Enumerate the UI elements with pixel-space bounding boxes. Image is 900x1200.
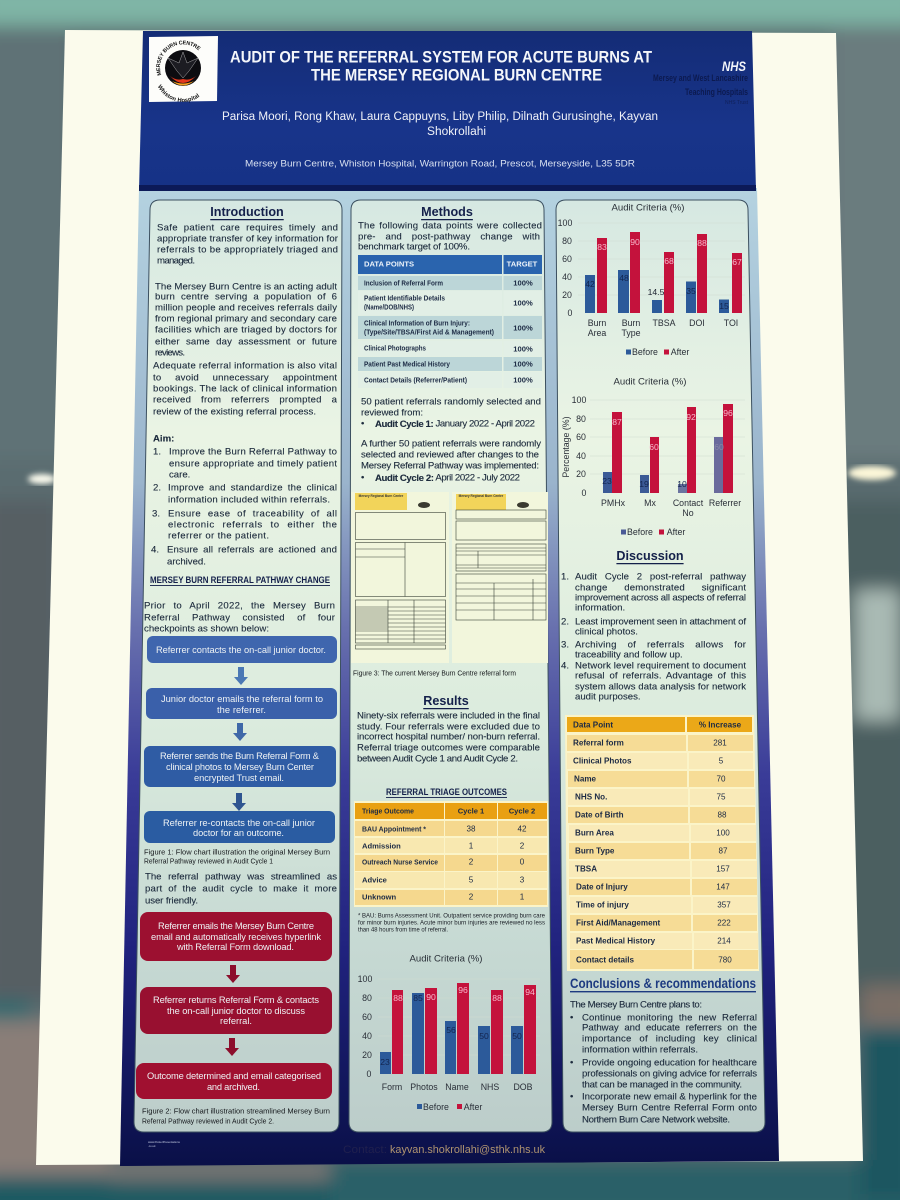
logo: MERSEY BURN CENTRE [156, 40, 201, 76]
text: introduction body: from regional primary and secondary care [155, 314, 337, 324]
text: discussion list [561, 572, 747, 702]
table: percent increase: First Aid/Management [576, 918, 661, 928]
table: percent increase: Name [574, 774, 597, 784]
panel: charts, discussion and conclusions [556, 200, 765, 1132]
bar chart: burn area, type, TBSA, DOI, TOI: 67 [732, 257, 742, 267]
text: conclusions list: Mersey Burn Centre Referral Form onto [582, 1102, 757, 1114]
bar chart: form, photos, name, NHS, DOB: 88 [492, 993, 502, 1003]
NHS trust logo: NHS Trust [725, 100, 749, 106]
bar chart: form, photos, name, NHS, DOB: 60 [362, 1012, 372, 1022]
text: methods intro [358, 220, 542, 252]
table: data points: Patient Identifiable Details [364, 294, 445, 302]
table: percent increase: Past Medical History [576, 936, 656, 946]
text: conclusions list: Northern Burn Care Network website. [582, 1114, 730, 1126]
figure: referral forms [351, 492, 548, 663]
bar chart: burn area, type, TBSA, DOI, TOI: 42 [585, 279, 595, 289]
table: triage outcomes: 0 [520, 858, 525, 866]
text: discussion list: 3. [561, 640, 569, 650]
flow chart: streamlined pathway: and archived. [207, 1082, 260, 1092]
bar chart: PMHx, Mx, contact number, referrer: 20 [576, 469, 586, 479]
bar chart: form, photos, name, NHS, DOB: 0 [367, 1069, 372, 1079]
table: data points: Patient Past Medical History [364, 360, 451, 368]
bar chart: form, photos, name, NHS, DOB: NHS [481, 1082, 499, 1092]
bar chart: PMHx, Mx, contact number, referrer: 40 [576, 451, 586, 461]
caption: figure 1: Figure 1: Flow chart illustration the original Mersey Burn [144, 848, 330, 856]
table: data points: Clinical Photographs [364, 344, 426, 352]
text: introduction body: Safe patient care requires timely and [157, 222, 338, 234]
heading: triage outcomes: REFERRAL TRIAGE OUTCOMES [386, 787, 507, 797]
bar chart: form, photos, name, NHS, DOB: After [464, 1102, 482, 1112]
bar chart: PMHx, Mx, contact number, referrer: Audit Criteria (%) [613, 376, 687, 388]
text: pathway intro: Prior to April 2022, the Mersey Burn [144, 600, 335, 612]
text: introduction body: to avoid unnecessary appointment [153, 372, 337, 384]
text: conclusions list: Provide ongoing education for healthcare [582, 1058, 757, 1068]
NHS trust logo: Teaching Hospitals [685, 87, 748, 97]
text: conclusions list: Incorporate new email & hyperlink for the [582, 1092, 757, 1102]
bar chart: burn area, type, TBSA, DOI, TOI: After [671, 347, 689, 357]
table: percent increase: Time of injury [576, 900, 629, 910]
bar chart: form, photos, name, NHS, DOB: Audit Criteria (%) [409, 954, 483, 964]
bar chart: burn area, type, TBSA, DOI, TOI: TBSA [653, 318, 676, 328]
flow chart: original pathway: Junior doctor emails the referral form to [161, 694, 323, 704]
text: streamlined pathway: user friendly. [145, 896, 198, 906]
text: discussion list: refusal of referrals. Advantage of this [575, 670, 746, 682]
text: audit cycles: selected and reviewed after changes to the [361, 450, 539, 460]
bar chart: form, photos, name, NHS, DOB: 94 [525, 987, 535, 997]
bar chart: form, photos, name, NHS, DOB: 88 [393, 993, 403, 1003]
text: discussion list: traceability and follow up. [575, 650, 683, 660]
bar chart: form, photos, name, NHS, DOB: Photos [410, 1082, 438, 1092]
table: percent increase: 100 [716, 828, 730, 838]
text: pathway intro: Referral Pathway consisted of four [144, 612, 336, 624]
text: introduction body: appropriate transfer of key information for [157, 234, 339, 244]
table: data points [358, 255, 542, 388]
table: percent increase: 147 [716, 882, 730, 892]
table: triage outcomes: Advice [362, 876, 387, 884]
text: discussion list: 2. [561, 616, 569, 628]
table: percent increase: 88 [717, 810, 727, 820]
text: results body: incorrect hospital number/ non-burn referral. [357, 732, 540, 742]
bar chart: PMHx, Mx, contact number, referrer: 60 [714, 442, 724, 452]
table: percent increase: Burn Type [575, 846, 615, 856]
bar chart: form, photos, name, NHS, DOB: Form [382, 1082, 402, 1092]
bar chart: PMHx, Mx, contact number, referrer: Percentage (%) [561, 416, 571, 478]
text: aims: 4. [151, 544, 159, 556]
bar chart: burn area, type, TBSA, DOI, TOI: 100 [558, 218, 572, 228]
table: triage outcomes [354, 801, 548, 907]
bar chart: form, photos, name, NHS, DOB: 40 [362, 1031, 372, 1041]
title: THE MERSEY REGIONAL BURN CENTRE [311, 66, 602, 84]
footer: printer credit [148, 1140, 180, 1148]
flow chart: original pathway: Referrer re-contacts the on-call junior [163, 818, 315, 828]
table: percent increase: 157 [716, 864, 730, 874]
table: data points: 100% [513, 324, 533, 332]
footer: printer credit: www.PosterPresentations [148, 1140, 180, 1144]
text: aims: Ensure ease of traceability of all [168, 508, 337, 520]
flow chart: streamlined pathway: Outcome determined and email categorised [147, 1071, 321, 1081]
text: introduction body: referrals to be appropriately triaged and [157, 244, 338, 256]
footer: contact: Contact: [343, 1144, 387, 1156]
text: discussion list: system allows data analysis for network [575, 682, 746, 692]
authors: Parisa Moori, Rong Khaw, Laura Cappuyns, Liby Philip, Dilnath Gurusinghe, Kayvan [222, 111, 658, 123]
table: triage outcomes: 42 [517, 824, 527, 834]
text: introduction body: managed. [157, 256, 195, 266]
table: triage outcomes: Cycle 1 [458, 806, 485, 816]
text: discussion list: 4. [561, 660, 569, 672]
text: aims: Aim: [153, 434, 174, 444]
text: conclusions list: Continue monitoring the new Referral [582, 1012, 757, 1024]
table: data points: Clinical Information of Burn Injury: [364, 318, 470, 328]
authors [222, 111, 658, 138]
bar chart: form, photos, name, NHS, DOB: DOB [513, 1082, 533, 1092]
text: methods intro: benchmark target of 100%. [358, 242, 470, 252]
header banner [139, 31, 756, 191]
table: triage outcomes: 1 [469, 842, 474, 850]
text: streamlined pathway [145, 872, 337, 906]
text: audit cycles: • [361, 472, 364, 484]
bar chart: PMHx, Mx, contact number, referrer: PMHx [601, 498, 626, 508]
text: footnote [358, 912, 545, 934]
table: percent increase: Burn Area [575, 828, 614, 838]
bar chart: form, photos, name, NHS, DOB: 56 [446, 1025, 456, 1035]
heading: discussion: Discussion [616, 549, 684, 563]
text: introduction body: bookings. The lack of clinical information [153, 384, 337, 394]
table: percent increase: 87 [718, 846, 728, 856]
text: introduction body: The Mersey Burn Centre is an acting adult [155, 282, 337, 292]
flow chart: streamlined pathway [136, 912, 332, 1099]
text: aims: electronic referrals to either the [168, 520, 337, 530]
text: conclusions list [570, 1000, 757, 1126]
table: data points: 100% [513, 298, 533, 308]
bar chart: form, photos, name, NHS, DOB: 50 [479, 1031, 489, 1041]
text: introduction body [153, 222, 339, 418]
flow chart: original pathway: Referrer sends the Burn Referral Form & [160, 751, 320, 761]
text: introduction body: reviews. [155, 348, 185, 358]
bar chart: form, photos, name, NHS, DOB: 100 [358, 974, 372, 984]
title [230, 48, 653, 84]
text: conclusions list: • [570, 1092, 573, 1102]
text: conclusions list: Pathway and educate referrers on the [582, 1022, 757, 1034]
footer: printer credit: .co.uk [148, 1144, 156, 1148]
bar chart: PMHx, Mx, contact number, referrer: Contact [673, 498, 704, 508]
text: introduction body: Adequate referral information is also vital [153, 360, 337, 372]
table: triage outcomes: Admission [362, 842, 401, 850]
bar chart: burn area, type, TBSA, DOI, TOI: 88 [697, 238, 707, 248]
table: percent increase: 70 [716, 774, 726, 784]
caption: figure 1 [144, 848, 330, 866]
text: audit cycles: reviewed from: [361, 408, 423, 418]
bar chart: burn area, type, TBSA, DOI, TOI: 35 [686, 286, 696, 296]
caption: figure 2: Referral Pathway reviewed in Audit Cycle 2. [142, 1116, 274, 1126]
bar chart: burn area, type, TBSA, DOI, TOI: 14.5 [648, 287, 665, 297]
logo [149, 36, 218, 102]
text: discussion list: information. [575, 602, 625, 614]
caption: figure 1: Referral Pathway reviewed in Audit Cycle 1 [144, 856, 273, 866]
bar chart: PMHx, Mx, contact number, referrer: 19 [639, 479, 649, 489]
text: discussion list: audit purposes. [575, 692, 641, 702]
bar chart: burn area, type, TBSA, DOI, TOI: Before [632, 347, 658, 357]
text: conclusions list: professionals on giving advice for referrals [582, 1068, 757, 1080]
bar chart: PMHx, Mx, contact number, referrer: 87 [612, 417, 622, 427]
text: conclusions list: • [570, 1012, 573, 1024]
table: percent increase: 780 [718, 956, 732, 964]
bar chart: form, photos, name, NHS, DOB: 85 [413, 993, 423, 1003]
bar chart: burn area, type, TBSA, DOI, TOI: 83 [597, 242, 607, 252]
flow chart: original pathway: the referrer. [217, 705, 266, 715]
bar chart: burn area, type, TBSA, DOI, TOI: Type [621, 328, 641, 338]
text: aims: Ensure all referrals are actioned and [167, 544, 337, 556]
bar chart: burn area, type, TBSA, DOI, TOI: 40 [562, 272, 572, 282]
bar chart: PMHx, Mx, contact number, referrer: 96 [723, 408, 733, 418]
bar chart: burn area, type, TBSA, DOI, TOI: 60 [562, 254, 572, 264]
text: aims: 1. [153, 446, 161, 458]
figure: referral forms: Mersey Regional Burn Centre [359, 494, 404, 498]
text: conclusions list: information within referrals. [582, 1044, 698, 1056]
table: data points: (Type/Site/TBSA/First Aid & Management) [364, 328, 494, 336]
bar chart: form, photos, name, NHS, DOB: Before [423, 1102, 449, 1112]
bar chart: burn area, type, TBSA, DOI, TOI: 80 [562, 236, 572, 246]
text: introduction body: received from referrers prompted a [153, 394, 338, 406]
figure: referral forms: Mersey Regional Burn Centre [459, 494, 504, 498]
text: conclusions list: that can be managed in the community. [582, 1080, 742, 1090]
bar chart: PMHx, Mx, contact number, referrer: Mx [644, 498, 656, 508]
table: percent increase: Data Point [573, 720, 613, 730]
text: discussion list: Archiving of referrals allows for [575, 640, 747, 650]
text: discussion list: improvement across all aspects of referral [575, 592, 746, 604]
text: aims [151, 434, 337, 568]
table: triage outcomes: Outreach Nurse Service [362, 858, 438, 866]
bar chart: PMHx, Mx, contact number, referrer: 60 [576, 432, 586, 442]
text: aims: information included within referrals. [168, 494, 330, 506]
bar chart: burn area, type, TBSA, DOI, TOI: 15 [719, 301, 729, 311]
table: triage outcomes: Unknown [362, 892, 397, 902]
bar chart: PMHx, Mx, contact number, referrer [561, 376, 745, 537]
bar chart: form, photos, name, NHS, DOB: Name [445, 1082, 469, 1092]
text: results body: study. Four referrals were excluded due to [357, 722, 540, 732]
bar chart: burn area, type, TBSA, DOI, TOI: DOI [689, 318, 705, 328]
text: introduction body: either same day assessment or future [155, 336, 337, 348]
text: aims: care. [169, 470, 190, 480]
table: triage outcomes: 5 [469, 876, 474, 884]
text: footnote: than 48 hours from time of referral. [358, 926, 448, 934]
table: data points: 100% [513, 376, 533, 384]
title: AUDIT OF THE REFERRAL SYSTEM FOR ACUTE BURNS AT [230, 48, 653, 66]
bar chart: burn area, type, TBSA, DOI, TOI [558, 202, 745, 357]
table: percent increase: Date of Injury [576, 882, 628, 892]
caption: figure 2 [142, 1106, 330, 1126]
heading: results: Results [423, 694, 469, 708]
table: triage outcomes: 38 [466, 824, 476, 834]
table: triage outcomes: Triage Outcome [362, 806, 414, 816]
table: data points: TARGET [507, 260, 538, 268]
text: methods intro: pre- and post-pathway change with [358, 232, 540, 242]
table: percent increase: 222 [717, 918, 731, 928]
bar chart: form, photos, name, NHS, DOB: 80 [362, 993, 372, 1003]
text: aims: ensure appropriate and timely patient [169, 458, 337, 470]
flow chart: streamlined pathway: Referrer emails the Mersey Burn Centre [158, 921, 314, 931]
flow chart: streamlined pathway: Referrer returns Referral Form & contacts [153, 995, 319, 1005]
bar chart: burn area, type, TBSA, DOI, TOI: 20 [562, 290, 572, 300]
NHS trust logo: NHS [722, 58, 747, 74]
table: percent increase: Clinical Photos [573, 756, 632, 766]
table: percent increase: TBSA [575, 864, 597, 874]
text: conclusions list: • [570, 1058, 573, 1068]
bar chart: PMHx, Mx, contact number, referrer: 60 [649, 442, 659, 452]
bar chart: PMHx, Mx, contact number, referrer: After [667, 527, 685, 537]
text: aims: archived. [167, 556, 206, 568]
text: audit cycles: Audit Cycle 1: January 2022 - April 2022 [375, 418, 535, 430]
table: percent increase: 357 [717, 900, 731, 910]
text: results body: between Audit Cycle 1 and Audit Cycle 2. [357, 754, 518, 764]
text: audit cycles [361, 396, 541, 484]
table: triage outcomes: 2 [520, 842, 525, 850]
heading: pathway change: MERSEY BURN REFERRAL PATHWAY CHANGE [150, 575, 330, 585]
table: percent increase: 214 [717, 936, 731, 946]
table: percent increase: Contact details [576, 956, 635, 964]
text: pathway intro [144, 600, 336, 634]
text: results body: Ninety-six referrals were included in the final [357, 710, 540, 722]
text: footnote: for minor burn injuries. Acute minor burn injuries are reviewed no less [358, 920, 545, 926]
text: pathway intro: checkpoints as shown below: [144, 624, 269, 634]
bar chart: PMHx, Mx, contact number, referrer: 10 [677, 479, 687, 489]
bar chart: burn area, type, TBSA, DOI, TOI: TOI [724, 318, 738, 328]
text: aims: 3. [152, 508, 160, 520]
flow chart: streamlined pathway: referral. [220, 1016, 252, 1026]
table: percent increase: Date of Birth [575, 810, 624, 820]
text: discussion list: Least improvement seen in attachment of [575, 616, 746, 628]
bar chart: form, photos, name, NHS, DOB: 90 [426, 992, 436, 1002]
text: aims: Improve and standardize the clinical [168, 482, 337, 494]
table: percent increase: Referral form [573, 738, 624, 748]
table: triage outcomes: BAU Appointment * [362, 824, 426, 834]
table: data points: 100% [513, 344, 533, 354]
text: audit cycles: A further 50 patient referrals were randomly [361, 438, 541, 450]
text: discussion list: Network level requirement to document [575, 660, 746, 672]
table: data points: DATA POINTS [364, 260, 414, 268]
text: introduction body: review of the existing referral process. [153, 406, 316, 418]
text: methods intro: The following data points were collected [358, 220, 542, 232]
bar chart: burn area, type, TBSA, DOI, TOI: 48 [619, 273, 629, 283]
table: triage outcomes: 2 [469, 858, 474, 866]
bar chart: burn area, type, TBSA, DOI, TOI: 0 [568, 308, 573, 318]
caption: figure 3: Figure 3: The current Mersey Burn Centre referral form [353, 668, 516, 678]
bar chart: form, photos, name, NHS, DOB: 96 [458, 985, 468, 995]
flow chart: streamlined pathway: email and automatically receives hyperlink [151, 932, 321, 942]
flow chart: streamlined pathway: the on-call junior doctor to discuss [167, 1006, 305, 1016]
flow chart: original pathway [144, 636, 337, 843]
table: data points: 100% [513, 360, 533, 368]
text: introduction body: burn centre serving a population of 6 [155, 292, 337, 302]
text: results body [357, 710, 540, 764]
table: data points: Contact Details (Referrer/Patient) [364, 376, 467, 384]
bar chart: burn area, type, TBSA, DOI, TOI: Audit Criteria (%) [611, 202, 685, 214]
NHS trust logo: Mersey and West Lancashire [653, 73, 748, 83]
table: triage outcomes: Cycle 2 [509, 806, 535, 816]
table: percent increase: % Increase [699, 720, 742, 730]
text: audit cycles: Mersey Referral Pathway was implemented: [361, 460, 539, 472]
text: introduction body: million people and receives referrals daily [155, 302, 337, 314]
text: aims: referrer or the patient. [168, 530, 269, 542]
bar chart: PMHx, Mx, contact number, referrer: 23 [602, 476, 612, 486]
affiliation: Mersey Burn Centre, Whiston Hospital, Warrington Road, Prescot, Merseyside, L35 5DR [245, 158, 635, 170]
footer: contact: kayvan.shokrollahi@sthk.nhs.uk [390, 1144, 545, 1156]
bar chart: burn area, type, TBSA, DOI, TOI: 90 [630, 237, 640, 247]
text: conclusions list: The Mersey Burn Centre plans to: [570, 1000, 702, 1010]
table: triage outcomes: 2 [469, 892, 474, 902]
NHS trust logo [653, 58, 749, 106]
logo: Whiston Hospital [158, 84, 200, 102]
caption: figure 2: Figure 2: Flow chart illustration streamlined Mersey Burn [142, 1106, 330, 1116]
table: percent increase [565, 715, 759, 971]
text: discussion list: 1. [561, 572, 569, 582]
bar chart: form, photos, name, NHS, DOB: 20 [362, 1050, 372, 1060]
bar chart: PMHx, Mx, contact number, referrer: Referrer [709, 498, 741, 508]
text: conclusions list: importance of including key clinical [582, 1034, 757, 1044]
authors: Shokrollahi [427, 126, 486, 138]
bar chart: burn area, type, TBSA, DOI, TOI: Burn [622, 318, 640, 328]
bar chart: PMHx, Mx, contact number, referrer: 80 [576, 414, 586, 424]
table: percent increase: NHS No. [575, 792, 607, 802]
table: percent increase: 75 [716, 792, 726, 802]
bar chart: PMHx, Mx, contact number, referrer: 100 [572, 395, 586, 405]
table: data points: 100% [513, 278, 533, 288]
text: introduction body: facilities which are triaged by doctors for [155, 324, 338, 336]
bar chart: form, photos, name, NHS, DOB [358, 954, 540, 1112]
text: audit cycles: • [361, 418, 364, 430]
table: triage outcomes: 1 [520, 892, 525, 902]
bar chart: PMHx, Mx, contact number, referrer: 92 [686, 412, 696, 422]
poster body background [120, 188, 779, 1166]
text: discussion list: Audit Cycle 2 post-referral pathway [575, 572, 746, 582]
table: percent increase: 281 [713, 738, 727, 748]
bar chart: PMHx, Mx, contact number, referrer: Before [627, 527, 653, 537]
bar chart: burn area, type, TBSA, DOI, TOI: Burn [588, 318, 606, 328]
bar chart: PMHx, Mx, contact number, referrer: 0 [582, 488, 587, 498]
bar chart: form, photos, name, NHS, DOB: 23 [380, 1057, 390, 1067]
heading: methods: Methods [421, 205, 473, 219]
flow chart: original pathway: doctor for an outcome. [193, 828, 284, 838]
flow chart: original pathway: encrypted Trust email. [194, 773, 284, 783]
text: aims: 2. [153, 482, 161, 494]
flow chart: original pathway: Referrer contacts the on-call junior doctor. [156, 645, 326, 655]
text: aims: Improve the Burn Referral Pathway to [169, 446, 337, 458]
bar chart: PMHx, Mx, contact number, referrer: No [682, 508, 694, 518]
heading: conclusions: Conclusions & recommendations [570, 975, 756, 991]
text: audit cycles: Audit Cycle 2: April 2022 - July 2022 [375, 472, 520, 484]
flow chart: streamlined pathway: with Referral Form download. [176, 942, 294, 952]
text: discussion list: clinical photos. [575, 626, 638, 638]
bar chart: burn area, type, TBSA, DOI, TOI: 68 [664, 256, 674, 266]
text: streamlined pathway: The referral pathway was streamlined as [145, 872, 337, 882]
text: audit cycles: 50 patient referrals randomly selected and [361, 396, 541, 408]
flow chart: original pathway: clinical photos to Mersey Burn Center [166, 762, 314, 772]
table: percent increase: 5 [719, 756, 724, 766]
panel: methods and results [349, 200, 552, 1132]
bar chart: form, photos, name, NHS, DOB: 50 [512, 1031, 522, 1041]
table: data points: (Name/DOB/NHS) [364, 302, 414, 312]
heading: introduction: Introduction [210, 205, 284, 219]
text: streamlined pathway: part of the audit cycle to make it more [145, 884, 337, 894]
table: data points: Inclusion of Referral Form [364, 278, 443, 288]
text: results body: Referral triage outcomes were comparable [357, 742, 540, 754]
table: triage outcomes: 3 [520, 876, 525, 884]
bar chart: burn area, type, TBSA, DOI, TOI: Area [588, 328, 606, 338]
panel: introduction and pathway [134, 200, 342, 1132]
text: footnote: * BAU: Burns Assessment Unit. Outpatient service providing burn care [358, 912, 545, 920]
text: discussion list: change demonstrated significant [575, 582, 746, 594]
